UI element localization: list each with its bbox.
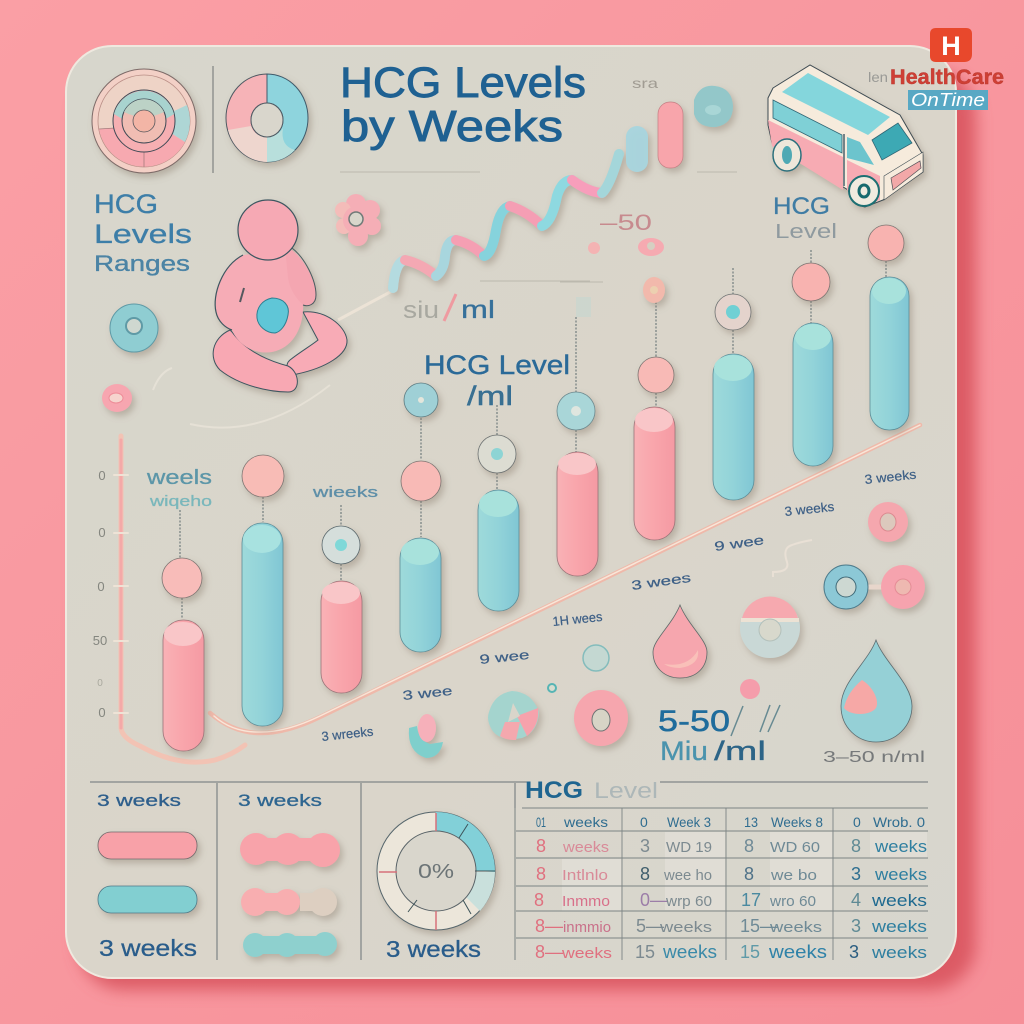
table text rows: Week 3 xyxy=(667,814,711,830)
value: small range label: 3–50 n/ml xyxy=(823,749,925,766)
unit label: siu/ml xyxy=(403,294,495,324)
table text rows: 8 xyxy=(536,836,546,856)
table text rows: 01 xyxy=(536,814,546,830)
table text rows: 8 xyxy=(536,864,546,884)
table text rows: we bo xyxy=(770,867,817,884)
panel: gauge: 0% xyxy=(418,861,454,883)
panel: gauge xyxy=(377,812,495,962)
table text rows: 5— xyxy=(636,916,664,936)
table text rows: wee ho xyxy=(663,867,712,884)
table text rows: 13 xyxy=(744,814,758,830)
icon: split circle xyxy=(740,597,800,658)
label: HCG Level right: Level xyxy=(775,221,837,243)
unit label: siu/ml: siu xyxy=(403,297,439,324)
axis tick labels: 0 xyxy=(98,705,106,720)
table text rows: weeks xyxy=(768,942,827,962)
label: HCG Level right xyxy=(773,193,837,243)
axis tick labels: 0 xyxy=(97,579,105,594)
bar chart: HCG levels by week xyxy=(162,225,909,751)
table text rows: 8 xyxy=(744,836,754,856)
labels: weeks above bars: wieeks xyxy=(312,484,378,501)
table text rows: weeks xyxy=(563,814,608,830)
heading: HCG levels ranges: Ranges xyxy=(94,251,190,276)
axis tick labels: 0 xyxy=(98,525,106,540)
table text rows: 15 xyxy=(740,942,760,962)
table text rows: 8 xyxy=(851,836,861,856)
icon: pink ring right xyxy=(868,502,908,542)
table: HCG level: Level xyxy=(594,778,658,803)
pink dots near -50 xyxy=(588,238,664,256)
ribbon tail line xyxy=(338,291,392,320)
table: HCG level xyxy=(515,777,928,962)
table cell tints xyxy=(562,832,927,911)
icon: blue drop xyxy=(841,640,912,742)
table text rows: weeks xyxy=(871,917,927,936)
bar 2 xyxy=(242,455,284,726)
faint label: sra: sra xyxy=(632,75,658,91)
labels: weeks above bars: wiqeho xyxy=(149,493,212,510)
heading: HCG levels ranges xyxy=(94,189,192,276)
labels: week markers along the slope: 3 wreeks xyxy=(321,724,375,744)
table text rows: 8 xyxy=(534,890,544,910)
bar 6 xyxy=(557,392,598,576)
legend pill pink xyxy=(98,832,197,859)
icon: linked rings xyxy=(824,565,925,609)
bar 8 xyxy=(713,294,754,500)
bar 1 xyxy=(162,558,204,751)
table text rows: Inmmo xyxy=(562,893,610,910)
unit label: siu/ml: ml xyxy=(461,296,495,324)
table text rows: inmmio xyxy=(563,919,611,936)
heading: HCG levels ranges: HCG xyxy=(94,189,158,219)
labels: week markers along the slope: 3 weeks xyxy=(784,499,836,519)
growth ribbon line xyxy=(393,154,619,288)
table text rows: 0 xyxy=(640,814,648,830)
labels: week markers along the slope: 3 wee xyxy=(402,683,453,703)
table text rows: 8 xyxy=(640,864,650,884)
value: 5-50 mIU/ml xyxy=(658,705,780,766)
table grid xyxy=(515,808,928,960)
table text rows: WD 60 xyxy=(770,839,820,856)
connector lines xyxy=(180,250,886,618)
panel: blob legend: 3 weeks xyxy=(238,791,322,810)
title: HCG Levels xyxy=(340,59,586,107)
labels: week markers along the slope: 9 wee xyxy=(713,532,765,554)
bar 3 xyxy=(321,526,362,693)
table text rows: weeks xyxy=(659,919,712,936)
table text rows: 3 xyxy=(851,916,861,936)
table text rows: 8— xyxy=(535,942,563,962)
table text rows: weeks xyxy=(662,942,717,962)
blob pink xyxy=(240,833,340,867)
table text rows xyxy=(534,814,927,962)
labels: week markers along the slope xyxy=(321,467,918,744)
bottom grid lines xyxy=(90,782,928,960)
icon: segmented target xyxy=(92,69,196,173)
label: HCG Level right: HCG xyxy=(773,193,830,220)
baby figure xyxy=(213,200,347,392)
axis tick labels: 0 xyxy=(97,678,103,689)
label: HCG Level /ml: /ml xyxy=(467,381,513,411)
label: -50: –50 xyxy=(600,210,652,235)
title: by Weeks xyxy=(341,102,563,151)
icon: large pink ring xyxy=(574,690,628,746)
logo: HealthCare OnTime: OnTime xyxy=(911,90,985,110)
bar 5 xyxy=(478,435,519,611)
labels: week markers along the slope: 1H wees xyxy=(552,609,604,629)
icon: pink flower xyxy=(335,194,381,246)
icon: small pink ring xyxy=(102,384,132,412)
table text rows: weeks xyxy=(562,839,609,856)
icon: small circle xyxy=(583,645,609,671)
table text rows: Weeks 8 xyxy=(771,814,823,830)
icon: van xyxy=(768,65,923,207)
gauge ring xyxy=(377,812,495,930)
icon: squiggle line xyxy=(773,540,812,577)
legend pill teal xyxy=(98,886,197,913)
bar 9 xyxy=(792,263,833,466)
blob pink and beige xyxy=(241,888,337,916)
table text rows: weeks xyxy=(561,945,612,962)
logo: HealthCare OnTime xyxy=(868,28,1004,110)
faint marker above bar 6 xyxy=(576,297,591,317)
bar 4 xyxy=(400,383,441,652)
table text rows: 15 xyxy=(635,942,655,962)
icon: pink dot xyxy=(740,679,760,699)
table text rows: weeks xyxy=(871,943,927,962)
panel: blob legend xyxy=(238,791,340,957)
axis tick labels xyxy=(93,468,107,720)
main panel xyxy=(66,46,956,978)
labels: week markers along the slope: 3 weeks xyxy=(864,467,918,487)
panel shadow xyxy=(78,70,976,990)
logo: HealthCare OnTime: len xyxy=(868,69,888,85)
icon: mosaic circle xyxy=(488,691,539,740)
table text rows: wro 60 xyxy=(769,893,816,910)
table text rows: Intlnlo xyxy=(562,867,608,884)
table text rows: 8— xyxy=(535,916,563,936)
table text rows: 15— xyxy=(740,916,778,936)
axis and baseline curves xyxy=(114,425,920,762)
table text rows: WD 19 xyxy=(666,839,712,856)
divider line xyxy=(212,66,214,173)
panel: bars legend: 3 weeks xyxy=(99,935,197,961)
value: 5-50 mIU/ml: 5-50 xyxy=(658,705,730,738)
panel: gauge: 3 weeks xyxy=(386,936,481,962)
small cylinders on ribbon xyxy=(626,86,733,172)
bar 10 xyxy=(868,225,909,430)
label: HCG Level /ml xyxy=(424,350,570,411)
icon: tiny teal ring xyxy=(548,684,556,692)
blob teal xyxy=(243,932,337,957)
table text rows: 3 xyxy=(640,836,650,856)
title xyxy=(340,59,586,151)
table text rows: weeks xyxy=(769,919,822,936)
value: 5-50 mIU/ml: /ml xyxy=(714,736,766,766)
table text rows: 17 xyxy=(741,890,761,910)
table text rows: 4 xyxy=(851,890,861,910)
bar 7 xyxy=(634,277,675,540)
labels: weeks above bars: weels xyxy=(146,467,212,489)
logo: HealthCare OnTime: H xyxy=(941,31,961,61)
panel: bars legend: 3 weeks xyxy=(97,791,181,810)
logo: HealthCare OnTime: HealthCare xyxy=(890,66,1004,89)
table text rows: wrp 60 xyxy=(665,893,712,910)
faint decorative lines xyxy=(153,172,737,428)
icon: pink drop xyxy=(653,605,707,678)
panel: bars legend xyxy=(97,791,197,961)
table text rows: weeks xyxy=(874,865,927,884)
axis tick labels: 0 xyxy=(98,468,106,483)
value: 5-50 mIU/ml: Miu xyxy=(660,736,708,766)
table text rows: 0— xyxy=(640,890,668,910)
table text rows: 8 xyxy=(744,864,754,884)
table text rows: weeks xyxy=(874,837,927,856)
table text rows: 3 xyxy=(851,864,861,884)
labels: week markers along the slope: 3 wees xyxy=(630,570,693,593)
labels: week markers along the slope: 9 wee xyxy=(479,647,530,667)
table text rows: 3 xyxy=(849,942,859,962)
label: HCG Level /ml: HCG Level xyxy=(424,350,570,380)
table text rows: 0 xyxy=(853,814,861,830)
icon: teal C shape xyxy=(409,714,443,758)
table text rows: Wrob. 0 xyxy=(873,814,925,830)
labels: weeks above bars xyxy=(146,467,378,510)
table: HCG level: HCG xyxy=(525,777,583,804)
table text rows: weeks xyxy=(871,891,927,910)
axis tick labels: 50 xyxy=(93,633,107,648)
heading: HCG levels ranges: Levels xyxy=(94,219,192,249)
icon: blue ring xyxy=(110,304,158,352)
icon: donut chart xyxy=(226,74,308,162)
